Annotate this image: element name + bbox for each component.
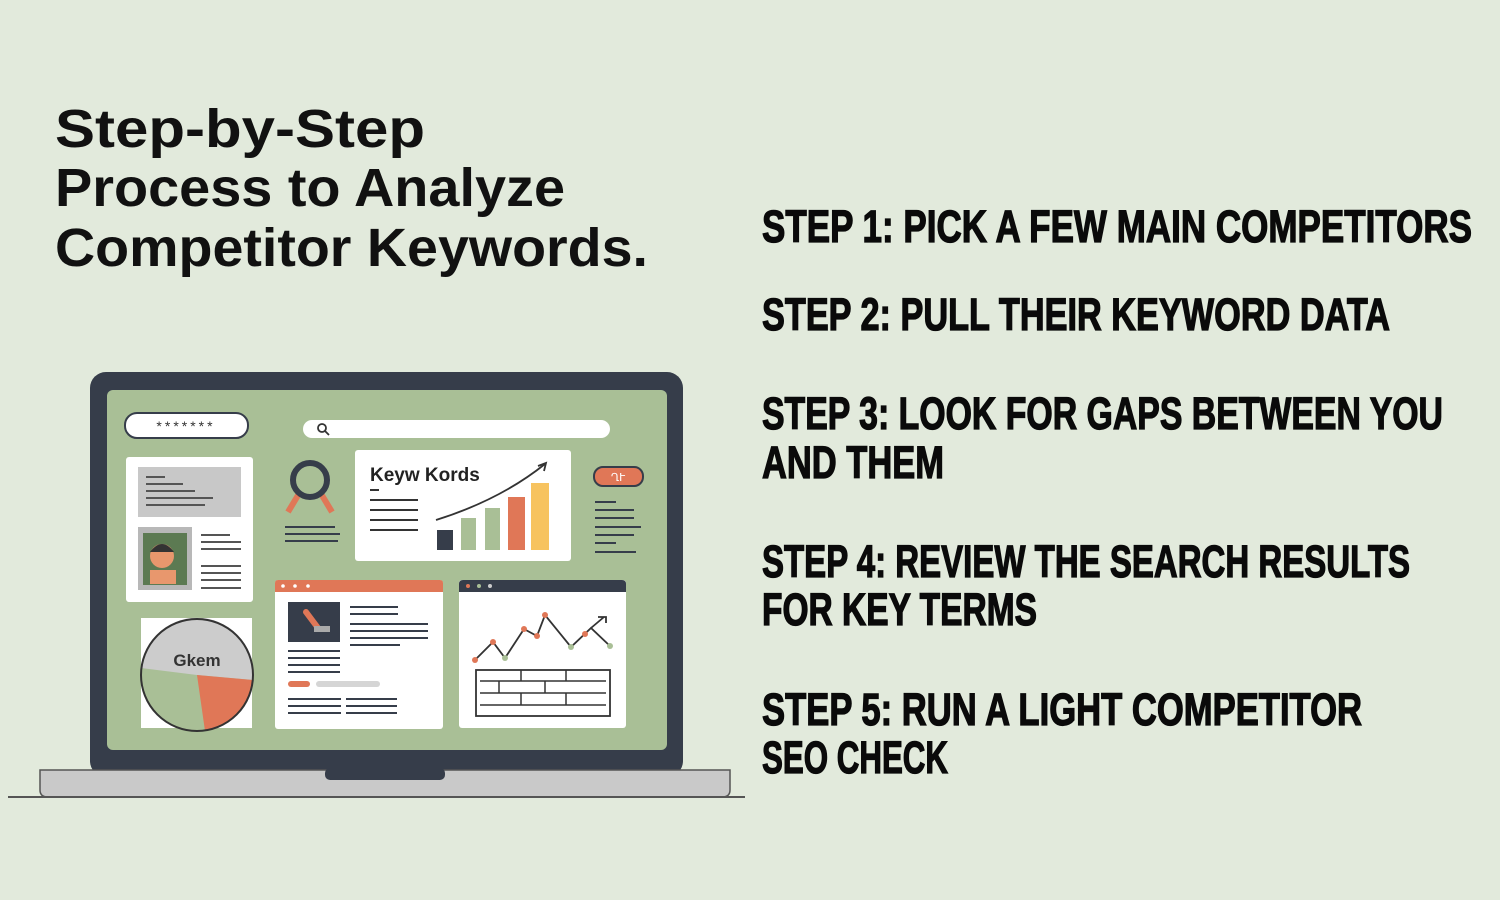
title: Step-by-Step [55,99,425,159]
laptop base [40,770,730,797]
orange tag [594,467,643,552]
step 3: AND THEM [762,437,944,488]
pie chart card [141,618,253,731]
step 4 [762,536,1410,635]
title [55,99,648,278]
step 3 [762,388,1443,488]
password pill [125,413,248,438]
step 5: SEO CHECK [762,732,948,783]
orange tag: ՂՒ [611,472,625,484]
title: Process to Analyze [55,158,565,218]
keywords chart card [355,450,571,561]
magnifier icon [285,463,340,541]
line chart card [459,580,626,728]
password pill: ******* [156,418,216,434]
article card [275,580,443,729]
steps list [762,201,1472,783]
keywords chart card: Keyw Kords [370,465,480,486]
laptop illustration [8,372,745,797]
title: Competitor Keywords. [55,218,648,278]
profile card [126,457,253,602]
pie chart card: Gkem [173,651,221,670]
search bar [303,420,610,438]
step 4: FOR KEY TERMS [762,584,1037,635]
step 5 [762,684,1362,783]
